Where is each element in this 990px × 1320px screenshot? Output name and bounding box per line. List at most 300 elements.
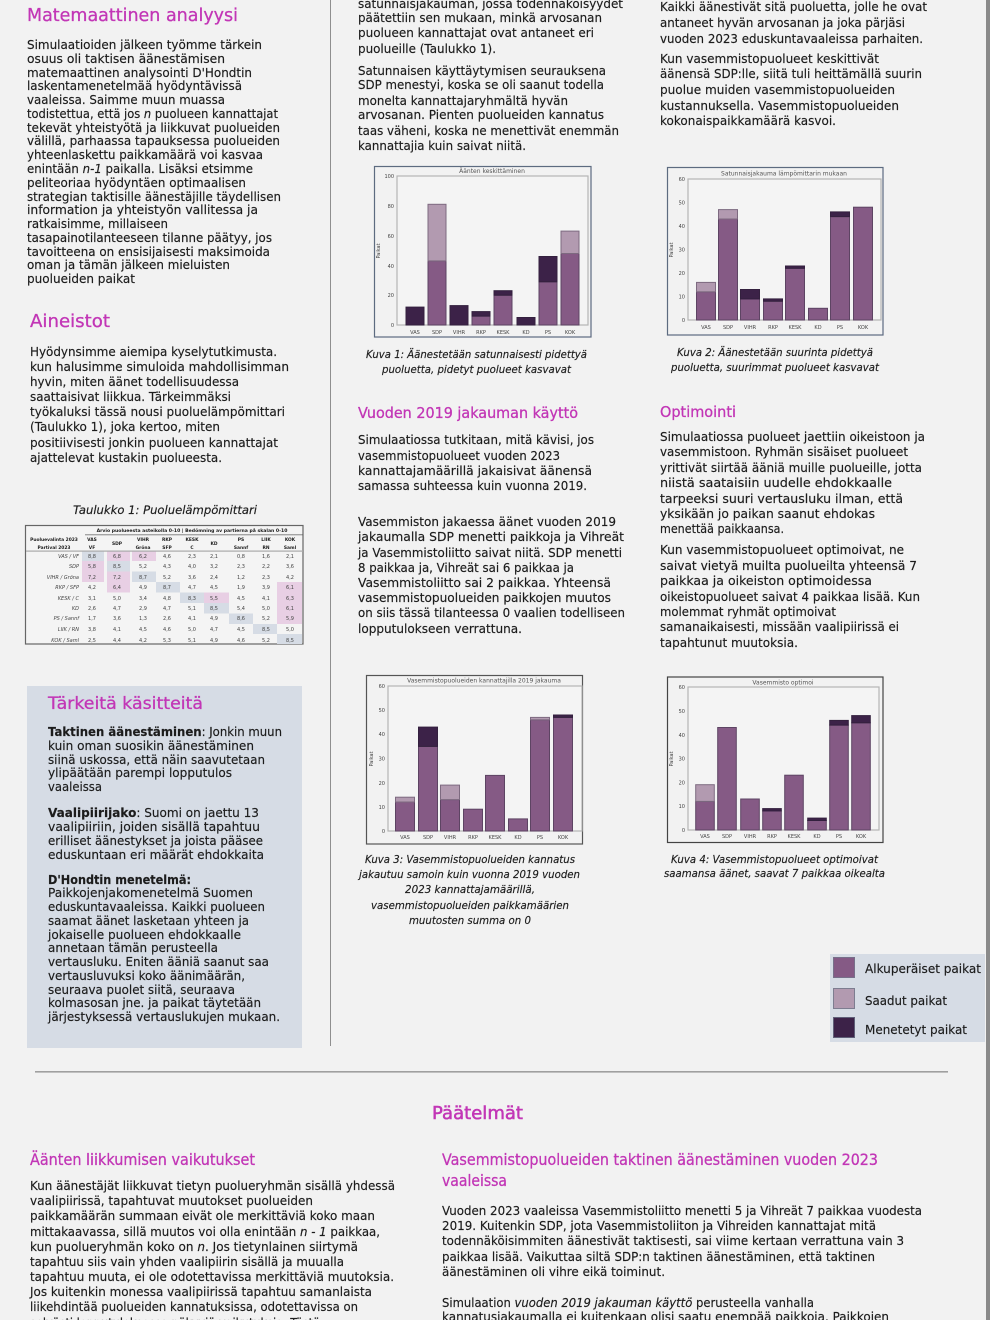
table: Puoluelämpömittari: PS / Sannf — [54, 616, 80, 622]
chart: Kuva 2 Satunnaisjakauma lämpömittarin mukaan: PS — [837, 325, 843, 331]
table: Puoluelämpömittari: 6,1 — [286, 606, 294, 612]
table: Puoluelämpömittari: 8,7 — [163, 585, 171, 591]
table: Puoluelämpömittari: 5,2 — [262, 638, 270, 644]
table: Puoluelämpömittari: Partival 2023 — [38, 545, 70, 551]
chart: Kuva 4 Vasemmisto optimoi: RKP — [767, 834, 777, 840]
chart: Kuva 4 Vasemmisto optimoi: KOK — [856, 834, 867, 840]
definition: Taktinen äänestäminen: ylipäätään parempi lopputulos — [48, 766, 232, 780]
text block: Matemaattinen analyysi: yhteenlaskettu paikkamäärä voi kasvaa — [27, 148, 263, 162]
table: Puoluelämpömittari: SDP — [112, 541, 123, 547]
chart: Kuva 3 Vasemmistopuolueiden kannattajilla 2019 jakauma: RKP — [468, 835, 478, 841]
caption: Kuva 1 — [366, 348, 587, 376]
table: Puoluelämpömittari: 4,7 — [210, 627, 218, 633]
text block: Optimointi: saivat vietyä muilta puolueilta yhteensä 7 — [660, 559, 917, 573]
table: Puoluelämpömittari: VF — [89, 545, 95, 551]
text block: Matemaattinen analyysi: osuus oli taktisen äänestämisen — [27, 52, 225, 66]
table: Puoluelämpömittari: LIIK / RN — [58, 627, 79, 633]
table: Puoluelämpömittari: 5,4 — [237, 606, 245, 612]
text block: Vuoden 2019 jakauman käyttö: Vasemmiston jakaessa äänet vuoden 2019 — [358, 515, 616, 529]
text block: Aineistot: hyvin, miten äänet todellisuudessa — [30, 375, 239, 389]
table: Puoluelämpömittari: KOK / Saml — [51, 638, 80, 644]
table: Puoluelämpömittari: 2,6 — [163, 616, 171, 622]
text block: Äänten liikkumisen vaikutukset: kun puolueryhmän koko on n. Jos tietynlainen siirtymä — [30, 1240, 358, 1254]
table: Puoluelämpömittari: 5,0 — [262, 606, 270, 612]
definition: D'Hondtin menetelmä: vertausluku. Eniten ääniä saanut saa — [48, 955, 269, 969]
chart: Kuva 1 Äänten keskittäminen: VAS — [410, 330, 420, 336]
chart: Kuva 1 Äänten keskittäminen: VIHR — [453, 330, 466, 336]
chart: Kuva 3 Vasemmistopuolueiden kannattajilla 2019 jakauma: 30 — [379, 756, 385, 762]
text block: Vuoden 2019 jakauman käyttö: 8 paikkaa ja, Vihreät sai 6 paikkaa ja — [358, 561, 574, 575]
text block: äänestys suosikkia: kokonaispaikkamäärä kasvoi. — [660, 114, 836, 128]
text block: äänestys suosikkia: Kun vasemmistopuolueet keskittivät — [660, 52, 879, 66]
text block: Matemaattinen analyysi — [27, 38, 281, 286]
caption: Kuva 3 — [357, 854, 580, 927]
chart: Kuva 2 Satunnaisjakauma lämpömittarin mukaan: 60 — [679, 177, 685, 183]
text block: Vuoden 2019 jakauman käyttö: samassa suhteessa kuin vuonna 2019. — [358, 479, 587, 493]
table: Puoluelämpömittari: 3,4 — [139, 596, 147, 602]
table: Puoluelämpömittari: KOK — [285, 537, 296, 543]
legend item: Saadut paikat — [834, 988, 947, 1008]
panel heading: Tärkeitä käsitteitä — [47, 694, 203, 714]
text block: Äänten liikkumisen vaikutukset: mittakaavassa, sillä muutos voi olla enintään n - 1 paikkaa, — [30, 1225, 380, 1239]
legend item: Menetetyt paikat: Menetetyt paikat — [865, 1023, 967, 1037]
text block: Optimointi: Simulaatiossa puolueet jaettiin oikeistoon ja — [660, 430, 925, 444]
chart: Kuva 1 Äänten keskittäminen: 20 — [388, 293, 394, 299]
text block: Vuoden 2019 jakauman käyttö: vasemmistopuolueiden paikkojen muutos — [358, 591, 611, 605]
text block: Matemaattinen analyysi: information ja yhteistyön vallitessa ja — [27, 203, 258, 217]
definition: Taktinen äänestäminen: Taktinen äänestäminen: Jonkin muun — [48, 725, 282, 739]
text block: Vuoden 2019 jakauman käyttö: on siis tässä tilanteessa 0 vaalien todelliseen — [358, 606, 625, 620]
legend item: Saadut paikat: Saadut paikat — [865, 994, 947, 1008]
table: Puoluelämpömittari: 6,2 — [139, 554, 147, 560]
chart: Kuva 2 Satunnaisjakauma lämpömittarin mukaan: Satunnaisjakauma lämpömittarin mukaan — [721, 170, 847, 178]
table: Puoluelämpömittari: 4,8 — [163, 596, 171, 602]
chart: Kuva 2 Satunnaisjakauma lämpömittarin mukaan: SDP — [723, 325, 733, 331]
table: Puoluelämpömittari: Arvio puolueesta asteikolla 0-10 | Bedömning av partierna på skalan 0-10 — [97, 527, 287, 534]
chart: Kuva 2 Satunnaisjakauma lämpömittarin mukaan: 20 — [679, 271, 685, 277]
definition: Taktinen äänestäminen — [48, 725, 282, 794]
heading: Vasemmistopuolueiden taktinen äänestäminen — [442, 1150, 878, 1190]
chart: Kuva 1 Äänten keskittäminen — [374, 166, 591, 337]
chart: Kuva 3 Vasemmistopuolueiden kannattajilla 2019 jakauma: VAS — [400, 835, 410, 841]
table: Puoluelämpömittari: 4,5 — [237, 627, 245, 633]
caption: Kuva 4 — [664, 854, 885, 880]
definition: Vaalipiirijako: Vaalipiirijako: Suomi on jaettu 13 — [48, 806, 259, 820]
chart: Kuva 3 Vasemmistopuolueiden kannattajilla 2019 jakauma — [366, 676, 582, 844]
table: Puoluelämpömittari: 1,6 — [262, 554, 270, 560]
table: Puoluelämpömittari: 4,2 — [286, 575, 294, 581]
heading: Matemaattinen analyysi: Matemaattinen analyysi — [27, 5, 238, 26]
table: Puoluelämpömittari: Gröna — [136, 545, 150, 551]
caption: Kuva 3: muutosten summa on 0 — [409, 915, 531, 927]
table: Puoluelämpömittari: 4,1 — [262, 596, 270, 602]
text block: satunnaisjakauman tulokset: arvosanan. Pienten puolueiden kannatus — [358, 108, 604, 122]
table: Puoluelämpömittari: 4,4 — [113, 638, 121, 644]
caption: Kuva 1: puoluetta, pidetyt puolueet kasvavat — [381, 364, 572, 376]
table: Puoluelämpömittari: 2,2 — [262, 564, 270, 570]
table: Puoluelämpömittari: PS — [238, 537, 244, 543]
heading: Optimointi: Optimointi — [660, 403, 736, 421]
caption: Kuva 1: Kuva 1: Äänestetään satunnaisesti pidettyä — [366, 348, 587, 361]
text block: Optimointi: yrittivät siirtää ääniä muille puolueille, jotta — [660, 461, 922, 475]
chart: Kuva 4 Vasemmisto optimoi: 30 — [679, 756, 685, 762]
chart: Kuva 2 Satunnaisjakauma lämpömittarin mukaan: VIHR — [744, 325, 757, 331]
table: Puoluelämpömittari: 8,5 — [210, 606, 218, 612]
table: Puoluelämpömittari: 5,1 — [188, 638, 196, 644]
table: Puoluelämpömittari: SDP — [69, 564, 79, 570]
table: Puoluelämpömittari: 1,7 — [88, 616, 96, 622]
text block: Vuoden 2019 jakauman käyttö: vasemmistopuolueet vuoden 2023 — [358, 449, 560, 463]
definition: D'Hondtin menetelmä: vertausluvuksi koko äänimäärän, — [48, 969, 245, 983]
chart: Kuva 2 Satunnaisjakauma lämpömittarin mukaan: 30 — [679, 248, 685, 254]
text block: Matemaattinen analyysi: tasapainotilanteeseen tilanne päätyy, jos — [27, 231, 272, 245]
text block: Optimointi: tarpeeksi suuri vertausluku ilman, että — [660, 492, 903, 506]
chart: Kuva 4 Vasemmisto optimoi — [668, 677, 883, 842]
table: Puoluelämpömittari: 5,9 — [286, 616, 294, 622]
text block: Vuoden 2019 jakauman käyttö: Vasemmistoliitto sai 2 paikkaa. Yhteensä — [358, 576, 611, 590]
caption: Kuva 3: jakautuu samoin kuin vuonna 2019 vuoden — [357, 869, 580, 881]
definition: Taktinen äänestäminen: vaaleissa — [48, 780, 102, 794]
table: Puoluelämpömittari: 4,6 — [163, 627, 171, 633]
text block: Optimointi: vasemmistoon. Ryhmän sisäiset puolueet — [660, 445, 908, 459]
table: Puoluelämpömittari: 4,9 — [210, 616, 218, 622]
chart: Kuva 1 Äänten keskittäminen: SDP — [432, 330, 442, 336]
caption: Kuva 3: Kuva 3: Vasemmistopuolueiden kannatus — [365, 854, 576, 866]
caption: Kuva 2: puoluetta, suurimmat puolueet kasvavat — [670, 362, 880, 374]
text block: Optimointi — [660, 430, 925, 650]
definition: D'Hondtin menetelmä — [47, 873, 280, 1024]
text block: Optimointi: Kun vasemmistopuolueet optimoivat, ne — [660, 543, 904, 557]
definition: D'Hondtin menetelmä: kolmasosan jne. ja paikat täytetään — [48, 996, 261, 1010]
table: Puoluelämpömittari: 5,5 — [210, 596, 218, 602]
text block: Matemaattinen analyysi: Simulaatioiden jälkeen työmme tärkein — [27, 38, 262, 52]
definition: D'Hondtin menetelmä: järjestyksessä vertauslukujen mukaan. — [47, 1010, 280, 1024]
text block: satunnaisjakauman tulokset: Satunnaisen käyttäytymisen seurauksena — [358, 64, 606, 78]
text block: äänestys suosikkia: kustannuksella. Vasemmistopuolueiden — [660, 99, 899, 113]
table: Puoluelämpömittari: 4,5 — [139, 627, 147, 633]
table: Puoluelämpömittari: 8,3 — [188, 596, 196, 602]
table: Puoluelämpömittari: 6,4 — [113, 585, 121, 591]
definition: D'Hondtin menetelmä: Paikkojenjakomenetelmä Suomen — [48, 886, 253, 900]
chart: Kuva 4 Vasemmisto optimoi: 20 — [679, 780, 685, 786]
chart: Kuva 3 Vasemmistopuolueiden kannattajilla 2019 jakauma: KESK — [489, 835, 502, 841]
table: Puoluelämpömittari: 4,9 — [139, 585, 147, 591]
text block: Optimointi: niistä saataisiin uudelle ehdokkaalle — [660, 476, 892, 490]
chart: Kuva 1 Äänten keskittäminen: RKP — [476, 330, 486, 336]
text block: Vasemmistopuolueiden taktinen äänestäminen: 2019. Kuitenkin SDP, jota Vasemmistoliiton ja Vihreiden kannattajat mitä — [442, 1219, 876, 1233]
table: Puoluelämpömittari: 3,6 — [188, 575, 196, 581]
definition: Vaalipiirijako: eduskuntaan eri määrät ehdokkaita — [48, 848, 264, 862]
table: Puoluelämpömittari: 6,1 — [286, 585, 294, 591]
chart: Kuva 3 Vasemmistopuolueiden kannattajilla 2019 jakauma: VIHR — [444, 835, 457, 841]
chart: Kuva 4 Vasemmisto optimoi: 60 — [679, 685, 685, 691]
text block: Aineistot: saattaisivat liikkua. Tärkeimmäksi — [30, 390, 231, 404]
chart: Kuva 1 Äänten keskittäminen: KD — [522, 330, 530, 336]
table: Puoluelämpömittari: 3,2 — [210, 564, 218, 570]
text block: satunnaisjakauman tulokset: puolueen kannattajat ovat antaneet eri — [358, 26, 594, 40]
chart: Kuva 4 Vasemmisto optimoi: PS — [836, 834, 842, 840]
text block: Aineistot: positiivisesti jonkin puolueen kannattajat — [30, 436, 278, 450]
table: Puoluelämpömittari: RKP / SFP — [55, 585, 79, 591]
text block: äänestys suosikkia: äänensä SDP:lle, siitä tuli heittämällä suurin — [660, 67, 922, 81]
heading: Äänten liikkumisen vaikutukset: Äänten liikkumisen vaikutukset — [30, 1150, 255, 1169]
definition: D'Hondtin menetelmä: saamat äänet lasketaan yhteen ja — [48, 914, 249, 928]
text block: Vasemmistopuolueiden taktinen äänestäminen: todennäköisimmiten äänestivät taktisesti, sai viime kertaan verrattuna vain 3 — [442, 1234, 904, 1248]
heading: Vasemmistopuolueiden taktinen äänestäminen: Vasemmistopuolueiden taktinen äänestäminen vuoden 2023 — [442, 1150, 878, 1169]
table: Puoluelämpömittari — [26, 526, 303, 644]
table: Puoluelämpömittari: 4,7 — [188, 585, 196, 591]
text block: Optimointi: tapahtunut muutoksia. — [660, 636, 798, 650]
chart: Kuva 2 Satunnaisjakauma lämpömittarin mukaan: 40 — [679, 224, 685, 230]
text block: Vuoden 2019 jakauman käyttö: Simulaatiossa tutkitaan, mitä kävisi, jos — [358, 433, 594, 447]
table: Puoluelämpömittari: Puoluevalinta 2023 — [30, 537, 78, 543]
table: Puoluelämpömittari: 3,8 — [88, 627, 96, 633]
text block: Vasemmistopuolueiden taktinen äänestäminen: Vuoden 2023 vaaleissa Vasemmistoliitto menetti 5 ja Vihreät 7 paikkaa vuodesta — [442, 1204, 922, 1218]
legend item: Menetetyt paikat — [834, 1018, 967, 1038]
chart: Kuva 4 Vasemmisto optimoi: 10 — [679, 804, 685, 810]
table: Puoluelämpömittari: 6,8 — [113, 554, 121, 560]
text block: satunnaisjakauman tulokset: SDP menestyi, koska se oli saanut todella — [358, 78, 604, 92]
table: Puoluelämpömittari: 8,5 — [262, 627, 270, 633]
definition: Taktinen äänestäminen: kuin oman suosikin äänestäminen — [48, 739, 254, 753]
chart: Kuva 1 Äänten keskittäminen: KOK — [565, 330, 576, 336]
chart: Kuva 1 Äänten keskittäminen: 60 — [388, 234, 394, 240]
chart: Kuva 3 Vasemmistopuolueiden kannattajilla 2019 jakauma: Paikat — [369, 751, 375, 767]
table: Puoluelämpömittari: 3,6 — [286, 564, 294, 570]
table: Puoluelämpömittari: Sannf — [234, 545, 248, 551]
chart: Kuva 4 Vasemmisto optimoi: KD — [813, 834, 821, 840]
text block: Äänten liikkumisen vaikutukset: Kun äänestäjät liikkuvat tietyn puolueryhmän sisällä yhdessä — [30, 1179, 395, 1193]
legend — [830, 954, 985, 1042]
definition: D'Hondtin menetelmä: eduskuntavaaleissa. Kaikki puolueen — [48, 900, 265, 914]
chart: Kuva 3 Vasemmistopuolueiden kannattajilla 2019 jakauma: 40 — [379, 732, 385, 738]
table: Puoluelämpömittari: 5,2 — [139, 564, 147, 570]
text block: Matemaattinen analyysi: tekevät yhteistyötä ja liikkuvat puolueiden — [27, 121, 280, 135]
table: Puoluelämpömittari: 8,5 — [113, 564, 121, 570]
chart: Kuva 3 Vasemmistopuolueiden kannattajilla 2019 jakauma: KD — [514, 835, 522, 841]
table: Puoluelämpömittari: 2,9 — [139, 606, 147, 612]
table: Puoluelämpömittari: 4,5 — [237, 596, 245, 602]
text block: Vuoden 2019 jakauman käyttö: ja Vasemmistoliitto saivat niitä. SDP menetti — [357, 546, 622, 560]
table: Puoluelämpömittari: KD — [72, 606, 79, 612]
chart: Kuva 4 Vasemmisto optimoi: 50 — [679, 709, 685, 715]
text block: Optimointi: oikeistopuolueet saivat 4 paikkaa lisää. Kun — [660, 590, 920, 604]
text block: äänestys suosikkia: antaneet hyvän arvosanan ja joka pärjäsi — [660, 16, 905, 30]
legend item: Alkuperäiset paikat: Alkuperäiset paikat — [865, 962, 981, 976]
table: Puoluelämpömittari: 5,1 — [188, 606, 196, 612]
text block: äänestys suosikkia: vuoden 2023 eduskuntavaaleissa parhaiten. — [660, 32, 923, 46]
table: Puoluelämpömittari: 7,2 — [88, 575, 96, 581]
table: Puoluelämpömittari: 5,2 — [163, 575, 171, 581]
table: Puoluelämpömittari: LIIK — [261, 537, 271, 543]
table: Puoluelämpömittari: VAS / VF — [58, 554, 79, 560]
definition: Taktinen äänestäminen: siinä uskossa, että näin saavutetaan — [48, 753, 265, 767]
table: Puoluelämpömittari: 4,2 — [88, 585, 96, 591]
chart: Kuva 2 Satunnaisjakauma lämpömittarin mukaan: VAS — [701, 325, 711, 331]
table: Puoluelämpömittari: 2,4 — [210, 575, 218, 581]
definition: Vaalipiirijako — [48, 806, 264, 862]
chart: Kuva 3 Vasemmistopuolueiden kannattajilla 2019 jakauma: Vasemmistopuolueiden kannattajilla 2019 jakauma — [407, 678, 561, 684]
panel: Tärkeitä käsitteitä — [27, 686, 302, 1048]
text block: Vasemmistopuolueiden taktinen äänestäminen: Simulaation vuoden 2019 jakauman käyttö perusteella vanhalla — [442, 1296, 814, 1310]
text block: Äänten liikkumisen vaikutukset: vaalipiirissä, tapahtuvat muutokset puolueiden — [30, 1194, 313, 1208]
chart: Kuva 1 Äänten keskittäminen: PS — [545, 330, 551, 336]
table: Puoluelämpömittari: 5,0 — [113, 596, 121, 602]
table: Puoluelämpömittari: 2,3 — [237, 564, 245, 570]
chart: Kuva 4 Vasemmisto optimoi: 0 — [682, 828, 685, 834]
table: Puoluelämpömittari: 3,9 — [262, 585, 270, 591]
text block: Äänten liikkumisen vaikutukset — [29, 1179, 395, 1320]
text block: Vuoden 2019 jakauman käyttö: jakaumalla SDP menetti paikkoja ja Vihreät — [357, 530, 624, 544]
table: Puoluelämpömittari: Saml — [284, 545, 297, 551]
text block: satunnaisjakauman tulokset: päätettiin sen mukaan, minkä arvosanan — [358, 11, 602, 25]
table: Puoluelämpömittari: 3,6 — [113, 616, 121, 622]
chart: Kuva 3 Vasemmistopuolueiden kannattajilla 2019 jakauma: SDP — [423, 835, 433, 841]
definition: D'Hondtin menetelmä: D'Hondtin menetelmä: — [48, 873, 191, 887]
text block: Äänten liikkumisen vaikutukset: Jos kuitenkin monessa vaalipiirissä tapahtuu samanlaista — [29, 1285, 372, 1299]
text block: Matemaattinen analyysi: todistettua, että jos n puolueen kannattajat — [27, 107, 278, 121]
text block: satunnaisjakauman tulokset: monelta kannattajaryhmältä hyvän — [358, 94, 568, 108]
table: Puoluelämpömittari: 5,3 — [163, 638, 171, 644]
text block: Vuoden 2019 jakauman käyttö — [357, 433, 625, 636]
text block: Matemaattinen analyysi: matemaattinen analysointi D'Hondtin — [27, 66, 252, 80]
chart: Kuva 2 Satunnaisjakauma lämpömittarin mukaan — [668, 168, 883, 335]
caption: Kuva 3: vasemmistopuolueiden paikkamäärien — [371, 900, 569, 912]
table: Puoluelämpömittari: 4,1 — [188, 616, 196, 622]
table: Puoluelämpömittari: 2,5 — [88, 638, 96, 644]
table: Puoluelämpömittari: 1,3 — [139, 616, 147, 622]
text block: Aineistot: kun halusimme simuloida mahdollisimman — [30, 360, 289, 374]
table: Puoluelämpömittari: RKP — [162, 537, 173, 543]
text block: Aineistot: (Taulukko 1), joka kertoo, miten — [30, 420, 220, 434]
caption: Kuva 2: Kuva 2: Äänestetään suurinta pidettyä — [677, 346, 873, 359]
table: Puoluelämpömittari: KESK — [186, 537, 199, 543]
text block: Aineistot: työkaluksi tässä nousi puoluelämpömittari — [30, 405, 285, 419]
table: Puoluelämpömittari: 4,7 — [163, 606, 171, 612]
table: Puoluelämpömittari: VIHR / Gröna — [47, 575, 79, 581]
table: Puoluelämpömittari: VIHR — [137, 537, 150, 543]
table: Puoluelämpömittari: 4,9 — [210, 638, 218, 644]
text block: äänestys suosikkia: Kaikki äänestivät sitä puoluetta, jolle he ovat — [660, 0, 927, 14]
table: Puoluelämpömittari: 8,5 — [286, 638, 294, 644]
text block: Optimointi: samanaikaisesti, missään vaalipiirissä ei — [660, 620, 899, 634]
text block: äänestys suosikkia: puolue muiden vasemmistopuolueiden — [660, 83, 895, 97]
table: Puoluelämpömittari: 8,7 — [139, 575, 147, 581]
text block: Matemaattinen analyysi: välillä, parhaassa tapauksessa puolueiden — [27, 134, 280, 148]
chart: Kuva 3 Vasemmistopuolueiden kannattajilla 2019 jakauma: PS — [537, 835, 543, 841]
table: Puoluelämpömittari: 4,2 — [139, 638, 147, 644]
table: Puoluelämpömittari: 4,5 — [210, 585, 218, 591]
chart: Kuva 4 Vasemmisto optimoi: VIHR — [744, 834, 757, 840]
text block: Optimointi: menettää paikkaansa. — [660, 522, 784, 536]
chart: Kuva 4 Vasemmisto optimoi: VAS — [700, 834, 710, 840]
chart: Kuva 1 Äänten keskittäminen: 80 — [388, 204, 394, 210]
table: Puoluelämpömittari: C — [190, 545, 194, 551]
caption: Kuva 4: Kuva 4: Vasemmistopuolueet optimoivat — [671, 854, 879, 866]
chart: Kuva 1 Äänten keskittäminen: 40 — [388, 264, 394, 270]
chart: Kuva 2 Satunnaisjakauma lämpömittarin mukaan: KESK — [789, 325, 802, 331]
chart: Kuva 2 Satunnaisjakauma lämpömittarin mukaan: 10 — [679, 294, 685, 300]
heading: Vasemmistopuolueiden taktinen äänestäminen: vaaleissa — [442, 1171, 507, 1190]
text block: Optimointi: yksikään jo paikan saanut ehdokas — [660, 507, 875, 521]
chart: Kuva 3 Vasemmistopuolueiden kannattajilla 2019 jakauma: 0 — [382, 829, 385, 835]
chart: Kuva 3 Vasemmistopuolueiden kannattajilla 2019 jakauma: 10 — [379, 805, 385, 811]
text block: Vasemmistopuolueiden taktinen äänestäminen: äänestäminen oli vihre eikä toiminut. — [442, 1265, 665, 1279]
text block: Matemaattinen analyysi: oman ja tämän jälkeen mieluisten — [27, 258, 230, 272]
chart: Kuva 4 Vasemmisto optimoi: 40 — [679, 733, 685, 739]
chart: Kuva 4 Vasemmisto optimoi: Paikat — [669, 751, 675, 767]
text block: Aineistot: ajattelevat kustakin puolueesta. — [30, 451, 222, 465]
table: Puoluelämpömittari: 2,3 — [188, 554, 196, 560]
text block: Matemaattinen analyysi: vaaleissa. Saimme muun muassa — [27, 93, 225, 107]
chart: Kuva 1 Äänten keskittäminen: Paikat — [376, 243, 382, 259]
chart: Kuva 3 Vasemmistopuolueiden kannattajilla 2019 jakauma: 60 — [379, 684, 385, 690]
chart: Kuva 1 Äänten keskittäminen: Äänten keskittäminen — [459, 168, 525, 175]
heading: Aineistot: Aineistot — [30, 311, 110, 332]
chart: Kuva 1 Äänten keskittäminen: 100 — [384, 174, 394, 180]
definition: D'Hondtin menetelmä: annetaan tämän perusteella — [48, 941, 218, 955]
table: Puoluelämpömittari: 4,1 — [113, 627, 121, 633]
table: Puoluelämpömittari: 4,7 — [113, 606, 121, 612]
chart: Kuva 4 Vasemmisto optimoi: KESK — [788, 834, 801, 840]
text block: Vuoden 2019 jakauman käyttö: lopputulokseen verrattuna. — [358, 622, 522, 636]
chart: Kuva 1 Äänten keskittäminen: 0 — [391, 323, 394, 329]
table: Puoluelämpömittari: KD — [210, 541, 218, 547]
table: Puoluelämpömittari: KESK / C — [58, 596, 80, 602]
text block: Äänten liikkumisen vaikutukset: liikehdintää puolueiden kannatuksissa, odotettavissa on — [30, 1300, 358, 1314]
table: Puoluelämpömittari: 4,0 — [188, 564, 196, 570]
chart: Kuva 1 Äänten keskittäminen: KESK — [497, 330, 510, 336]
chart: Kuva 2 Satunnaisjakauma lämpömittarin mukaan: KD — [814, 325, 822, 331]
text block: Matemaattinen analyysi: tavoitteena on ensisijaisesti maksimoida — [27, 245, 270, 259]
table: Puoluelämpömittari: 5,8 — [88, 564, 96, 570]
text block: Vasemmistopuolueiden taktinen äänestäminen — [442, 1204, 922, 1320]
table: Puoluelämpömittari: 8,8 — [88, 554, 96, 560]
chart: Kuva 2 Satunnaisjakauma lämpömittarin mukaan: 50 — [679, 200, 685, 206]
table: Puoluelämpömittari: 2,3 — [262, 575, 270, 581]
table title: Taulukko 1: Puoluelämpömittari — [73, 503, 258, 517]
text block: Matemaattinen analyysi: laskentamenetelmää hyödyntävissä — [27, 79, 242, 93]
text block: Optimointi: paikkaa ja oikeiston optimoidessa — [660, 574, 872, 588]
table: Puoluelämpömittari: 8,6 — [237, 616, 245, 622]
text block: Vasemmistopuolueiden taktinen äänestäminen: paikkaa lisää. Vaikuttaa siltä SDP:n taktinen äänestäminen, että taktinen — [442, 1250, 875, 1264]
heading: Päätelmät: Päätelmät — [432, 1103, 523, 1124]
table: Puoluelämpömittari: 4,6 — [163, 554, 171, 560]
definition: Vaalipiirijako: vaalipiiriin, joiden sisällä tapahtuu — [48, 820, 260, 834]
text block: Äänten liikkumisen vaikutukset: tapahtuu muuta, ei ole odotettavissa merkittäviä muutoksia. — [30, 1270, 394, 1284]
definition: Vaalipiirijako: erilliset äänestykset ja joista pääsee — [48, 834, 263, 848]
table: Puoluelämpömittari: 5,0 — [286, 627, 294, 633]
text block: Äänten liikkumisen vaikutukset: tapahtuu siis vain yhden vaalipiirin sisällä ja muualla — [30, 1255, 344, 1269]
text block: Äänten liikkumisen vaikutukset: paikkamäärän summaan eivät ole merkittäviä koko maan — [30, 1209, 375, 1223]
text block: Aineistot — [30, 345, 289, 465]
table: Puoluelämpömittari: 2,1 — [210, 554, 218, 560]
table: Puoluelämpömittari: 1,9 — [237, 585, 245, 591]
text block: Matemaattinen analyysi: puolueiden paikat — [27, 272, 135, 286]
chart: Kuva 3 Vasemmistopuolueiden kannattajilla 2019 jakauma: KOK — [558, 835, 569, 841]
caption: Kuva 3: 2023 kannattajamäärillä, — [405, 884, 535, 896]
text block: Matemaattinen analyysi: enintään n-1 paikalla. Lisäksi etsimme — [27, 162, 253, 176]
table: Puoluelämpömittari: 4,3 — [163, 564, 171, 570]
text block: Matemaattinen analyysi: strategian taktisille äänestäjille täydellisen — [27, 190, 281, 204]
text block: Matemaattinen analyysi: peliteoriaa hyödyntäen optimaalisen — [27, 176, 246, 190]
definition: D'Hondtin menetelmä: seuraava puolet siitä, seuraava — [48, 983, 235, 997]
table: Puoluelämpömittari: 5,2 — [262, 616, 270, 622]
chart: Kuva 2 Satunnaisjakauma lämpömittarin mukaan: 0 — [682, 318, 685, 324]
table: Puoluelämpömittari: 2,6 — [88, 606, 96, 612]
chart: Kuva 4 Vasemmisto optimoi: Vasemmisto optimoi — [752, 680, 814, 686]
table: Puoluelämpömittari: 6,3 — [286, 596, 294, 602]
